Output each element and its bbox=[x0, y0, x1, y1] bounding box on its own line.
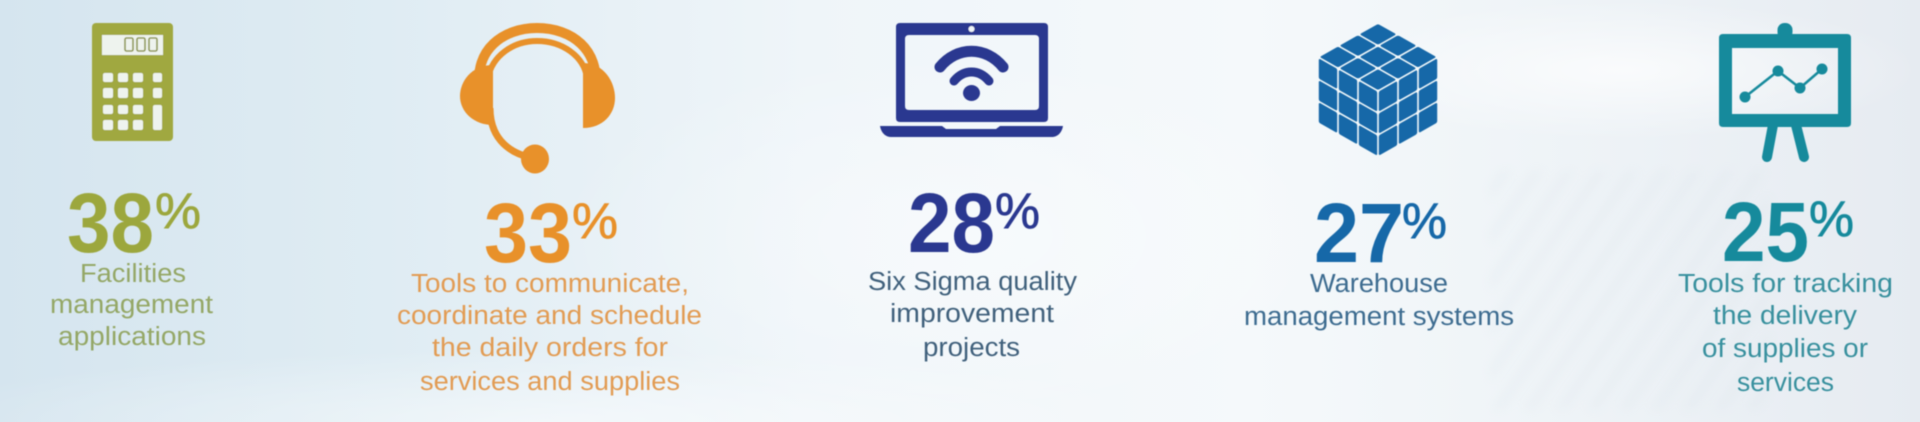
label: tools for tracking delivery: of supplies or bbox=[1702, 335, 1869, 363]
label: warehouse management systems: Warehouse bbox=[1310, 270, 1448, 298]
label: tools to communicate bbox=[397, 270, 702, 396]
panel: delivery tracking 25% bbox=[1678, 23, 1893, 397]
panel: communication tools 33% bbox=[397, 28, 702, 396]
statistic: 33%: 33 bbox=[484, 186, 572, 280]
statistic: 38%: % bbox=[155, 183, 201, 239]
label: tools to communicate: Tools to communicate, bbox=[411, 270, 689, 298]
label: facilities management applications: management bbox=[50, 291, 213, 319]
label: facilities management applications: applications bbox=[58, 323, 206, 351]
label: six sigma bbox=[868, 268, 1077, 362]
icon: calculator bbox=[92, 23, 173, 141]
statistic: 38%: 38 bbox=[67, 176, 154, 270]
icon: presentation board bbox=[1719, 23, 1851, 157]
label: six sigma: Six Sigma quality bbox=[868, 268, 1077, 296]
statistic: 25%: % bbox=[1809, 191, 1854, 247]
label: tools for tracking delivery: Tools for tracking bbox=[1678, 270, 1893, 298]
label: warehouse management systems bbox=[1244, 270, 1514, 331]
statistic: 25%: 25 bbox=[1722, 185, 1809, 279]
label: facilities management applications: Facilities bbox=[80, 260, 186, 288]
statistic: 27%: % bbox=[1402, 193, 1447, 249]
label: facilities management applications bbox=[50, 260, 213, 351]
panel: warehouse management 27% bbox=[1244, 24, 1514, 331]
statistic: 38% bbox=[67, 176, 201, 270]
statistic: 28%: 28 bbox=[908, 176, 995, 270]
statistic: 28%: % bbox=[995, 183, 1040, 239]
label: tools to communicate: the daily orders for bbox=[432, 334, 669, 362]
statistic: 33% bbox=[484, 186, 618, 280]
label: six sigma: projects bbox=[923, 334, 1020, 362]
label: tools for tracking delivery: the delivery bbox=[1713, 302, 1857, 330]
label: warehouse management systems: management systems bbox=[1244, 303, 1514, 331]
label: tools to communicate: services and supplies bbox=[420, 368, 680, 396]
panel: six sigma 28% bbox=[868, 23, 1077, 362]
panel: facilities management 38% bbox=[50, 23, 213, 351]
statistic: 27%: 27 bbox=[1314, 186, 1404, 280]
statistic: 33%: % bbox=[572, 193, 618, 249]
icon: cube bbox=[1319, 24, 1437, 156]
label: tools to communicate: coordinate and schedule bbox=[397, 302, 702, 330]
icon: laptop with wifi bbox=[880, 23, 1063, 137]
icon: headset bbox=[460, 28, 615, 174]
label: tools for tracking delivery bbox=[1678, 270, 1893, 397]
label: tools for tracking delivery: services bbox=[1737, 369, 1834, 397]
label: six sigma: improvement bbox=[890, 300, 1054, 328]
